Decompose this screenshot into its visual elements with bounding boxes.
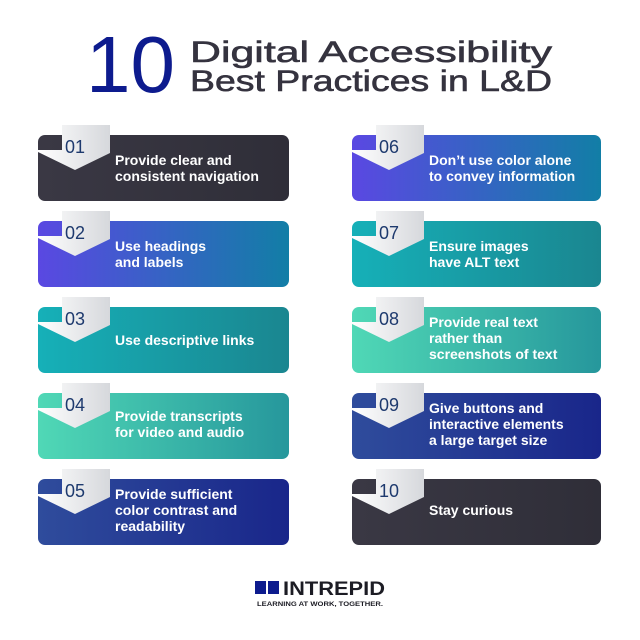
card 08: screenshots of text <box>429 346 558 362</box>
card 10: Stay curious <box>429 502 513 518</box>
card 08: 08 <box>379 309 399 329</box>
card 06: 06 <box>379 137 399 157</box>
card 08: rather than <box>429 330 502 346</box>
icon: book <box>255 581 279 594</box>
card 07: Ensure images <box>429 238 529 254</box>
card 02: Use headings <box>115 238 206 254</box>
card 02: and labels <box>115 254 184 270</box>
card 09: a large target size <box>429 432 547 448</box>
card 09 <box>352 383 601 459</box>
card 01: Provide clear and <box>115 152 232 168</box>
title: 10 <box>86 20 175 109</box>
card 08 <box>352 297 601 373</box>
title: Best Practices in L&D <box>190 65 552 98</box>
card 03 <box>38 297 289 373</box>
card 06: Don’t use color alone <box>429 152 572 168</box>
card 04: for video and audio <box>115 424 244 440</box>
card 04: Provide transcripts <box>115 408 243 424</box>
card 05: 05 <box>65 481 85 501</box>
card 05: color contrast and <box>115 502 237 518</box>
card 01: consistent navigation <box>115 168 259 184</box>
title: Digital Accessibility <box>190 36 552 69</box>
card 09: Give buttons and <box>429 400 543 416</box>
card 01: 01 <box>65 137 85 157</box>
card 03: Use descriptive links <box>115 332 255 348</box>
logo: INTREPID <box>283 579 385 600</box>
card 05 <box>38 469 289 545</box>
card 09: 09 <box>379 395 399 415</box>
card 07: 07 <box>379 223 399 243</box>
card 04: 04 <box>65 395 85 415</box>
card 08: Provide real text <box>429 314 538 330</box>
card 02: 02 <box>65 223 85 243</box>
card 10 <box>352 469 601 545</box>
card 05: readability <box>115 518 185 534</box>
card 01 <box>38 125 289 201</box>
card 06: to convey information <box>429 168 575 184</box>
card 06 <box>352 125 601 201</box>
card 07: have ALT text <box>429 254 520 270</box>
card 05: Provide sufficient <box>115 486 233 502</box>
card 02 <box>38 211 289 287</box>
title <box>86 20 552 109</box>
logo <box>255 579 385 608</box>
card 03: 03 <box>65 309 85 329</box>
logo: LEARNING AT WORK, TOGETHER. <box>257 602 383 608</box>
card 07 <box>352 211 601 287</box>
card 04 <box>38 383 289 459</box>
card 09: interactive elements <box>429 416 564 432</box>
card 10: 10 <box>379 481 399 501</box>
